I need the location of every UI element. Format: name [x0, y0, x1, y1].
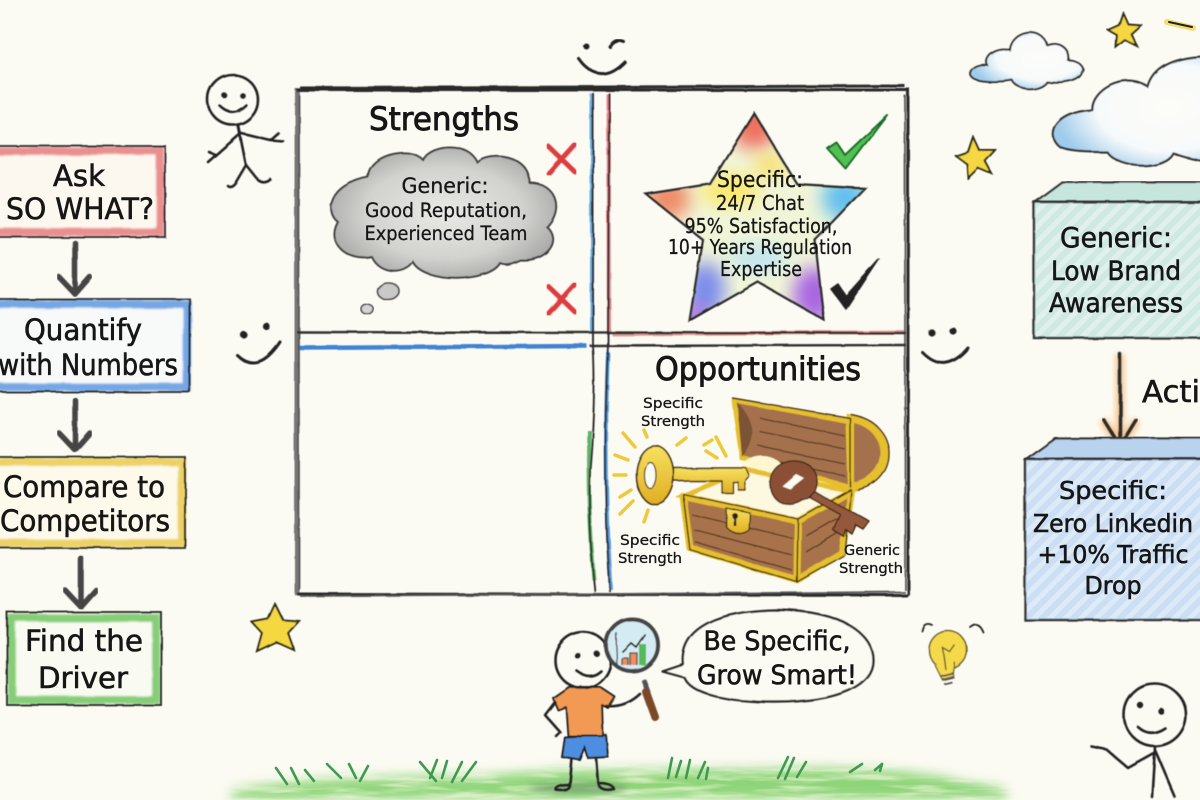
- speech bubble: Grow Smart!: [697, 660, 857, 691]
- grass strip: [224, 756, 1014, 800]
- stick figure: top left waving: [208, 75, 283, 186]
- smiley: left: [237, 323, 280, 363]
- chest lid: [732, 398, 889, 491]
- rusty key: [770, 461, 869, 537]
- step box: Find the Driver: Find the: [25, 624, 143, 658]
- label: Generic Strength: Generic: [844, 543, 900, 559]
- label: Generic Strength: Strength: [839, 561, 903, 577]
- SWOT matrix: [296, 86, 908, 596]
- step box: Compare to Competitors: Compare to: [3, 470, 165, 504]
- golden key: [636, 446, 750, 504]
- star: bottom left: [252, 604, 299, 651]
- step box: Ask So What: Ask: [53, 159, 105, 193]
- step box: Quantify with Numbers: with Numbers: [0, 348, 178, 382]
- cube: generic threat: [1034, 182, 1200, 338]
- thought cloud: generic strengths: Experienced Team: [364, 222, 528, 245]
- matrix frame: [296, 86, 908, 596]
- speech bubble: [662, 610, 873, 702]
- cube: generic threat: Generic:: [1060, 221, 1172, 254]
- label: Specific Strength top: Strength: [641, 414, 705, 430]
- label: Specific Strength bottom: [618, 533, 682, 567]
- cloud: small top right: [970, 33, 1083, 89]
- label: Specific Strength bottom: Specific: [620, 533, 680, 549]
- arrow: step three to four: [65, 558, 96, 607]
- yellow dash mark: [1167, 22, 1193, 28]
- rainbow star: specific strengths: Expertise: [720, 257, 802, 281]
- step box: Compare to Competitors: Competitors: [0, 504, 170, 538]
- label: Specific Strength bottom: Strength: [618, 551, 682, 567]
- cube: specific threat: [1025, 438, 1200, 620]
- label: Generic Strength: [839, 543, 903, 577]
- step box: Find the Driver: Driver: [38, 661, 128, 695]
- flow: analysis steps: [0, 146, 190, 705]
- cube: specific threat: +10% Traffic: [1038, 540, 1188, 569]
- cube: specific threat: Specific:: [1059, 476, 1167, 505]
- rainbow star: specific strengths: 10+ Years Regulation: [668, 235, 852, 259]
- stick figure: bottom right: [1092, 684, 1186, 797]
- icon: magnifying glass with chart: [606, 619, 658, 717]
- icon: red cross upper: [548, 144, 575, 174]
- star: top right: [1108, 13, 1141, 47]
- cloud: large top right: [1053, 56, 1200, 170]
- rainbow star: specific strengths: [642, 110, 868, 323]
- rainbow star: specific strengths: 24/7 Chat: [716, 191, 804, 215]
- arrow: step two to three: [59, 400, 90, 450]
- step box: Find the Driver: [7, 612, 161, 705]
- golden sparkles: [614, 430, 726, 522]
- thought cloud: generic strengths: Good Reputation,: [365, 199, 527, 222]
- cube: specific threat: Drop: [1084, 571, 1142, 600]
- treasure chest: [636, 398, 889, 582]
- arrow: action: [1103, 354, 1200, 446]
- step box: Ask So What: [0, 146, 165, 237]
- heading: Opportunities: Opportunities: [655, 350, 861, 388]
- icon: light bulb: [922, 624, 983, 684]
- step box: Quantify with Numbers: Quantify: [24, 313, 142, 347]
- cube: specific threat: Zero Linkedin: [1033, 509, 1193, 538]
- character with magnifying glass: [545, 610, 873, 790]
- icon: green check: [827, 115, 887, 169]
- thought cloud: generic strengths: [331, 147, 556, 314]
- smiley: right: [923, 327, 968, 363]
- icon: black check: [831, 259, 879, 309]
- arrow: action: Acti: [1142, 375, 1200, 410]
- chest base: [683, 470, 851, 582]
- step box: Quantify with Numbers: [0, 299, 190, 392]
- step box: Ask So What: SO WHAT?: [6, 192, 154, 226]
- label: Specific Strength top: Specific: [643, 396, 703, 412]
- cube: generic threat: Low Brand: [1051, 256, 1181, 287]
- heading: Strengths: Strengths: [369, 100, 519, 138]
- character body: [545, 632, 640, 790]
- star: right middle: [956, 137, 995, 178]
- rainbow star: specific strengths: 95% Satisfaction,: [684, 214, 838, 238]
- cube: generic threat: Awareness: [1049, 288, 1183, 319]
- rainbow star: specific strengths: Specific:: [717, 168, 803, 193]
- speech bubble: Be Specific,: [704, 626, 850, 657]
- icon: red cross lower: [548, 284, 575, 314]
- step box: Compare to Competitors: [0, 457, 185, 548]
- smiley: top: [578, 41, 625, 74]
- thought cloud: generic strengths: Generic:: [402, 174, 488, 198]
- label: Specific Strength top: [641, 396, 705, 430]
- arrow: step one to two: [59, 243, 90, 294]
